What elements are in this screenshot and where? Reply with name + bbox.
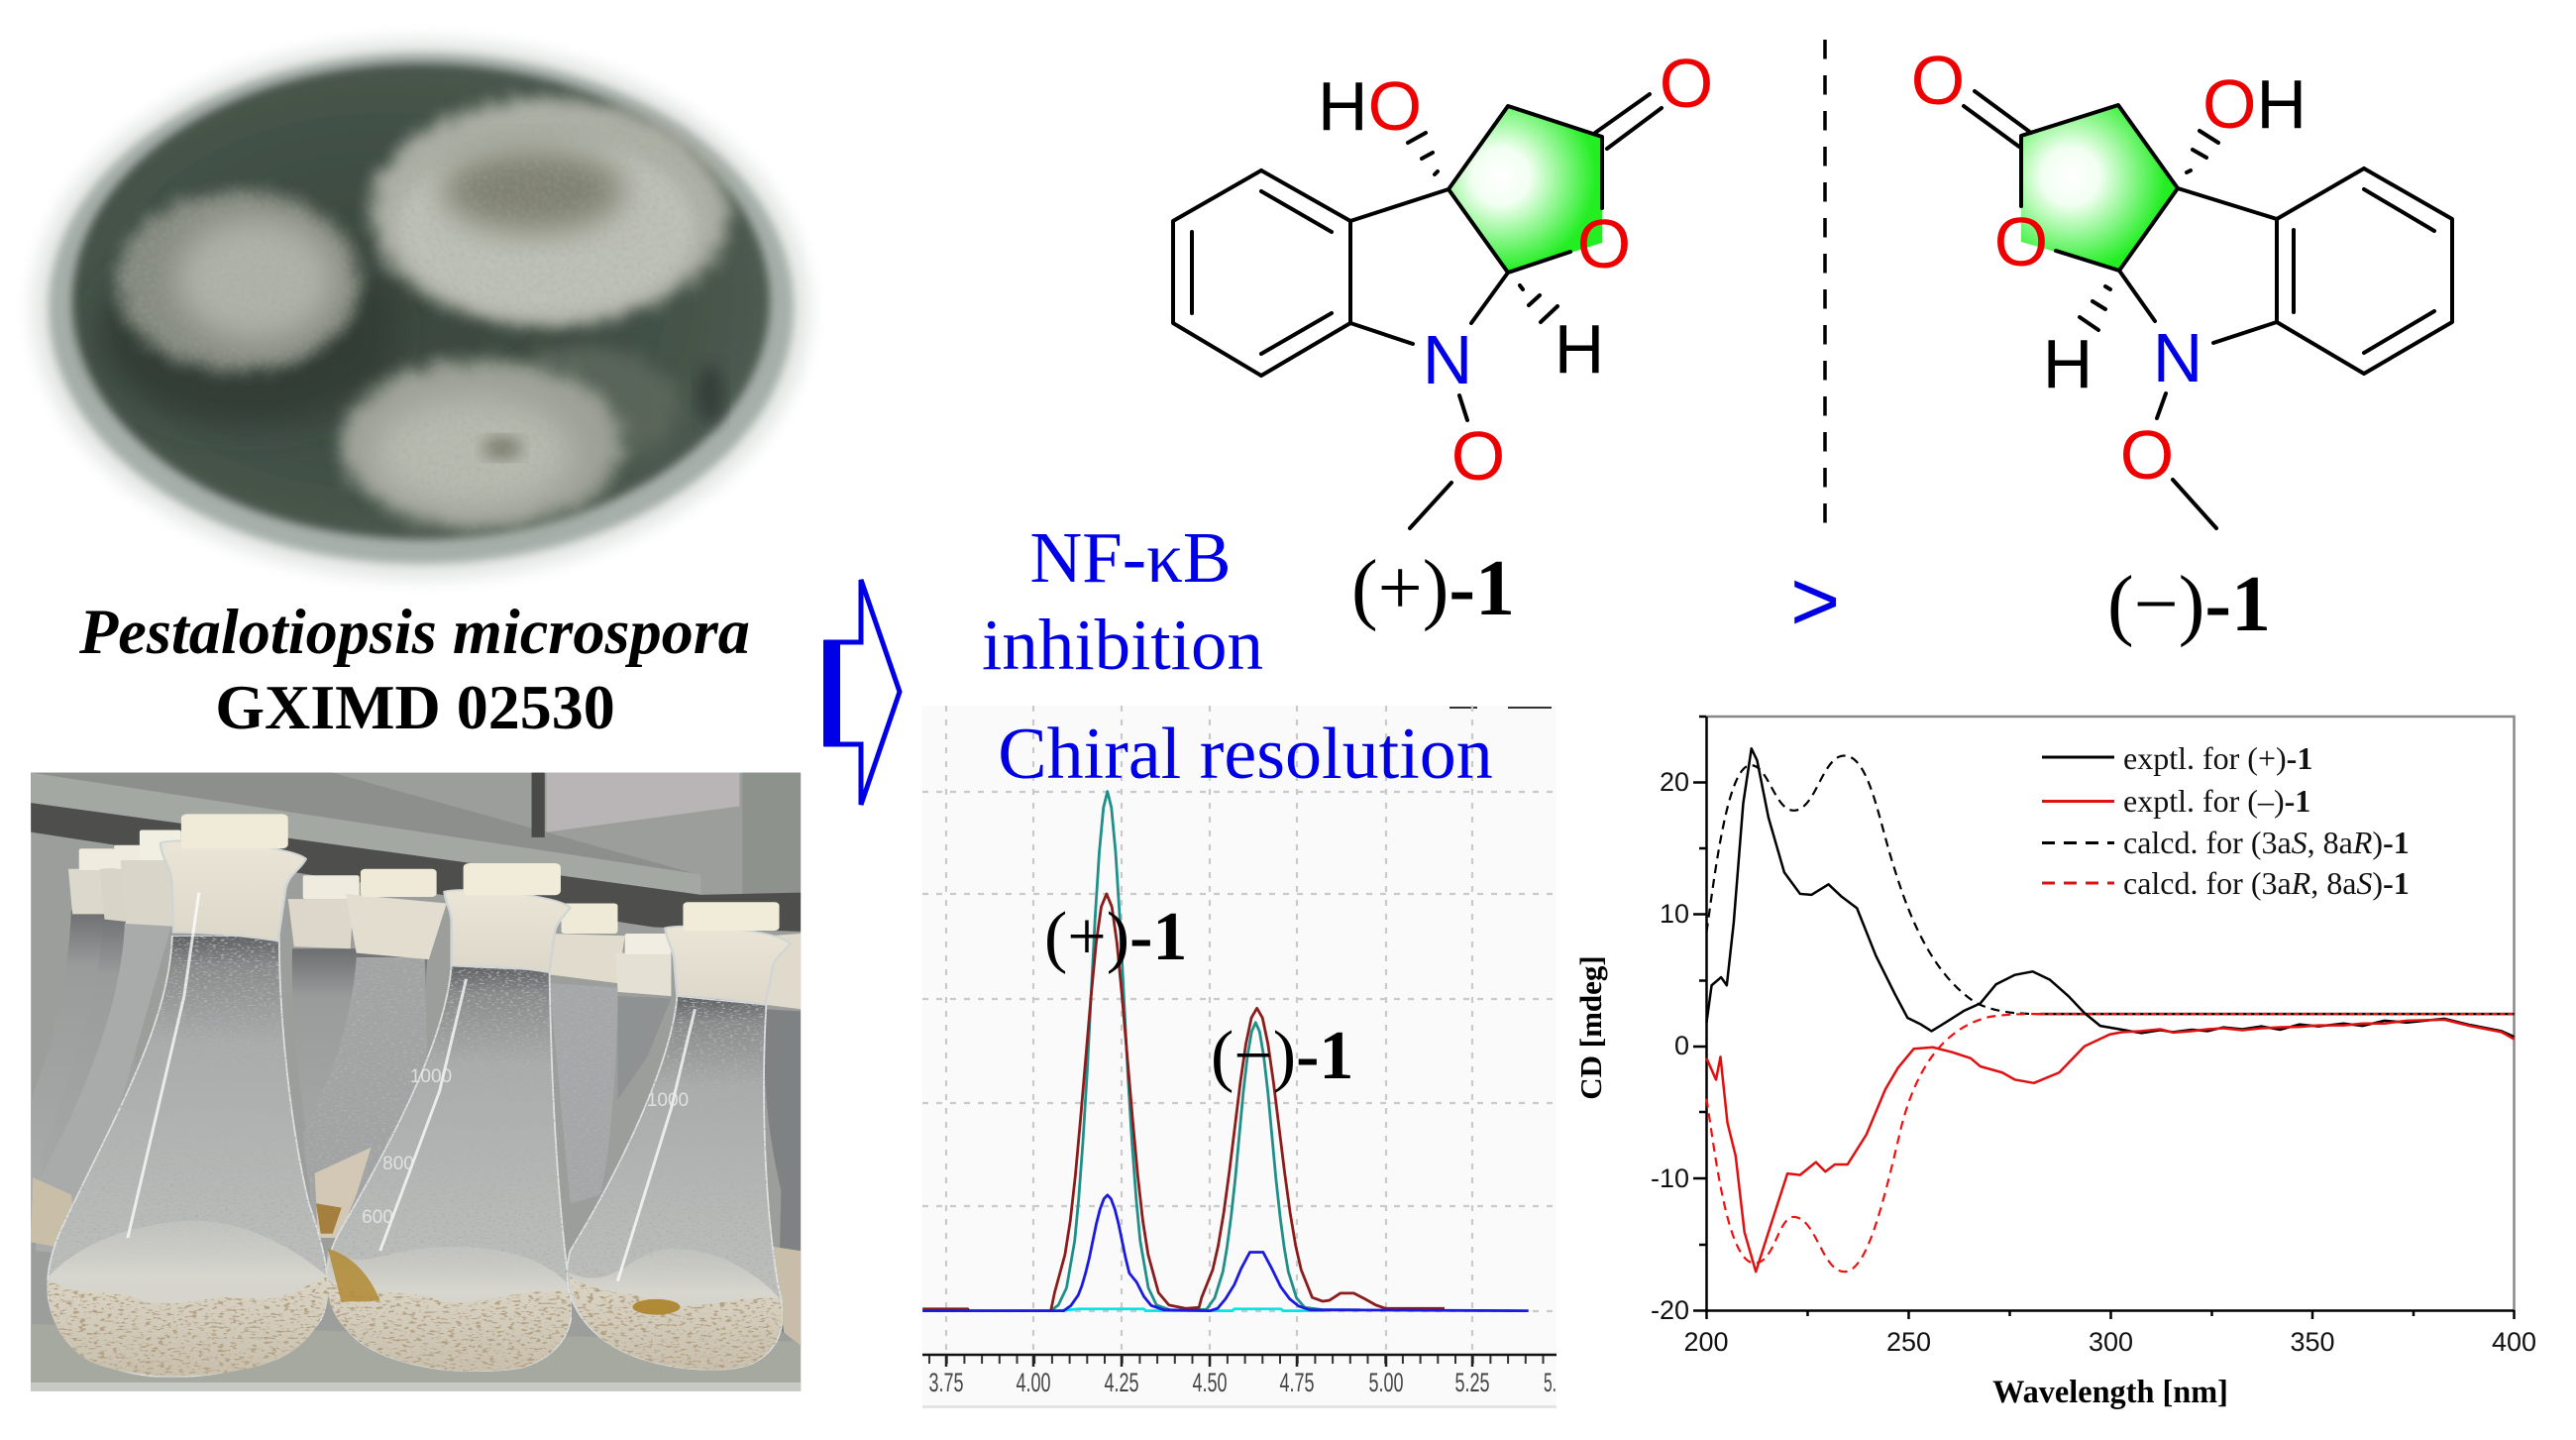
atom labels: OH	[2202, 65, 2307, 143]
axis labels	[1651, 767, 2536, 1357]
axis labels: 250	[1886, 1327, 1931, 1357]
chromatogram axis: 4.75	[1280, 1368, 1314, 1397]
chromatogram axis: 5.25	[1454, 1368, 1490, 1397]
flask graduation marks: 600	[362, 1207, 393, 1228]
NF-kB inhibition label	[982, 517, 1263, 685]
y axis title: CD [mdeg]	[1573, 955, 1608, 1100]
green lactone ring	[2021, 105, 2178, 271]
compound label (-)-1: (−)-1	[2107, 561, 2271, 648]
legend	[2042, 740, 2410, 901]
atom labels	[1911, 42, 2307, 494]
chiral resolution label: Chiral resolution	[998, 714, 1493, 795]
structure: (-)-1	[1911, 42, 2452, 528]
atom labels: H	[1555, 310, 1604, 388]
chromatogram axis	[922, 1355, 1556, 1397]
background flasks	[31, 831, 801, 1346]
mirror dashed line	[1823, 40, 1827, 526]
flask graduation marks: 1000	[647, 1090, 689, 1111]
axis labels: 300	[2089, 1327, 2133, 1357]
foreground flask middle	[327, 863, 572, 1372]
chromatogram axis: 5.00	[1369, 1368, 1403, 1397]
structure: (+)-1	[1173, 45, 1713, 528]
chromatogram traces	[922, 792, 1529, 1311]
chromatogram axis: 4.00	[1017, 1368, 1050, 1397]
legend: exptl. for (+)-1	[2123, 740, 2312, 776]
photo: Erlenmeyer flasks with solid culture	[31, 773, 801, 1391]
atom labels: O	[1994, 203, 2048, 280]
chromatogram axis: 3.75	[929, 1368, 963, 1397]
atom labels	[1318, 45, 1713, 495]
legend: calcd. for (3aS, 8aR)-1	[2123, 825, 2410, 860]
chromatogram panel	[922, 706, 1556, 1408]
plot frame and ticks	[1693, 717, 2515, 1319]
peak label (-)-1: (−)-1	[1211, 1018, 1353, 1094]
species name label	[78, 597, 750, 742]
atom labels: O	[1451, 417, 1505, 495]
CD spectrum chart	[1573, 717, 2536, 1409]
species name label: GXIMD 02530	[215, 672, 615, 742]
atom labels: H	[2043, 325, 2093, 402]
bonds	[1173, 94, 1662, 528]
spectra curves	[1706, 748, 2515, 1272]
atom labels: O	[1577, 205, 1631, 282]
axis labels: 10	[1660, 899, 1689, 929]
atom labels: HO	[1318, 67, 1422, 145]
photo: petri dish with fungal colonies	[31, 38, 811, 581]
flask graduation marks: 1000	[410, 1066, 452, 1087]
legend: calcd. for (3aR, 8aS)-1	[2123, 865, 2410, 901]
legend: exptl. for (–)-1	[2123, 783, 2310, 819]
chromatogram axis: 4.25	[1104, 1368, 1139, 1397]
axis labels: 200	[1683, 1327, 1729, 1357]
axis labels: 350	[2290, 1327, 2335, 1357]
species name label: Pestalotiopsis microspora	[78, 597, 750, 667]
flask graduation marks: 800	[382, 1154, 414, 1174]
compound label (+)-1: (+)-1	[1351, 545, 1515, 632]
foreground flask right	[567, 902, 790, 1370]
NF-kB inhibition label: inhibition	[982, 605, 1263, 685]
atom labels: O	[1660, 45, 1713, 122]
axis labels: 20	[1660, 767, 1689, 797]
atom labels: N	[2153, 319, 2202, 396]
block arrow	[823, 580, 900, 805]
x axis title: Wavelength [nm]	[1992, 1374, 2228, 1409]
atom labels: O	[1911, 42, 1965, 119]
atom labels: O	[2120, 416, 2174, 494]
axis labels: -20	[1651, 1295, 1689, 1325]
chromatogram axis: 5.	[1544, 1368, 1556, 1397]
atom labels: N	[1423, 321, 1472, 398]
foreground flask left	[48, 814, 329, 1377]
NF-kB inhibition label: NF-κB	[1029, 517, 1232, 598]
green lactone ring	[1449, 106, 1602, 273]
axis labels: -10	[1651, 1163, 1689, 1193]
chromatogram axis: 4.50	[1193, 1368, 1227, 1397]
greater-than sign: >	[1790, 554, 1840, 649]
axis labels: 400	[2492, 1327, 2536, 1357]
axis labels: 0	[1674, 1031, 1689, 1060]
bonds	[1964, 91, 2452, 528]
peak label (+)-1: (+)-1	[1044, 899, 1187, 975]
flask graduation marks	[362, 1066, 689, 1228]
